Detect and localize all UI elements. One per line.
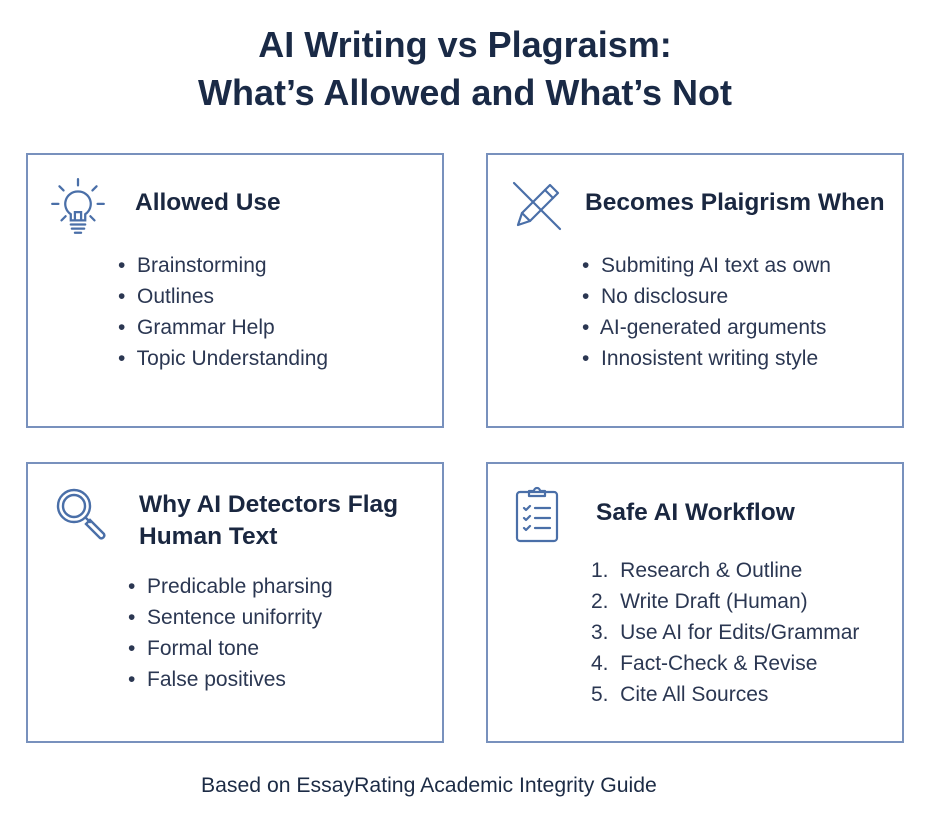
icon: crossed pen bbox=[512, 182, 562, 230]
title: AI Writing vs Plagraism: bbox=[258, 24, 672, 65]
panel: safe workflow: 1. Research & Outline bbox=[591, 559, 802, 582]
panel: allowed use bbox=[26, 153, 444, 428]
panel: becomes plagiarism: • AI-generated arguments bbox=[582, 316, 826, 339]
panel: detectors: • False positives bbox=[128, 668, 286, 691]
panel: detectors: • Sentence uniforrity bbox=[128, 606, 322, 629]
heading bbox=[139, 491, 398, 550]
heading: Becomes Plaigrism When bbox=[585, 189, 885, 216]
title bbox=[198, 24, 732, 113]
panel: safe workflow: 4. Fact-Check & Revise bbox=[591, 652, 817, 675]
title: What’s Allowed and What’s Not bbox=[198, 72, 732, 113]
panel: becomes plagiarism: • Submiting AI text as own bbox=[582, 254, 831, 277]
list bbox=[128, 575, 333, 691]
panel: safe workflow: 2. Write Draft (Human) bbox=[591, 590, 808, 613]
heading: Safe AI Workflow bbox=[596, 499, 795, 526]
panel: allowed use: • Outlines bbox=[118, 285, 214, 308]
panel: allowed use: • Grammar Help bbox=[118, 316, 275, 339]
list bbox=[582, 254, 831, 370]
panel: allowed use: • Brainstorming bbox=[118, 254, 267, 277]
icon: light bulb bbox=[51, 178, 105, 234]
panel: safe workflow: 3. Use AI for Edits/Grammar bbox=[591, 621, 859, 644]
list bbox=[591, 559, 860, 706]
heading: Why AI Detectors Flag bbox=[139, 491, 398, 518]
icon: magnifier bbox=[56, 488, 106, 540]
icon: clipboard bbox=[516, 486, 558, 542]
panel: allowed use: • Topic Understanding bbox=[118, 347, 328, 370]
panel: detectors: • Formal tone bbox=[128, 637, 259, 660]
panel: detectors: • Predicable pharsing bbox=[128, 575, 333, 598]
panel: becomes plagiarism: • No disclosure bbox=[582, 285, 728, 308]
footer: Based on EssayRating Academic Integrity Guide bbox=[201, 774, 657, 797]
panel: safe workflow bbox=[486, 462, 904, 743]
panel: becomes plagiarism: • Innosistent writing style bbox=[582, 347, 818, 370]
heading: Allowed Use bbox=[135, 189, 281, 216]
panel: detectors bbox=[26, 462, 444, 743]
panel: becomes plagiarism bbox=[486, 153, 904, 428]
list bbox=[118, 254, 328, 370]
heading: Human Text bbox=[139, 523, 277, 550]
panel: safe workflow: 5. Cite All Sources bbox=[591, 683, 768, 706]
